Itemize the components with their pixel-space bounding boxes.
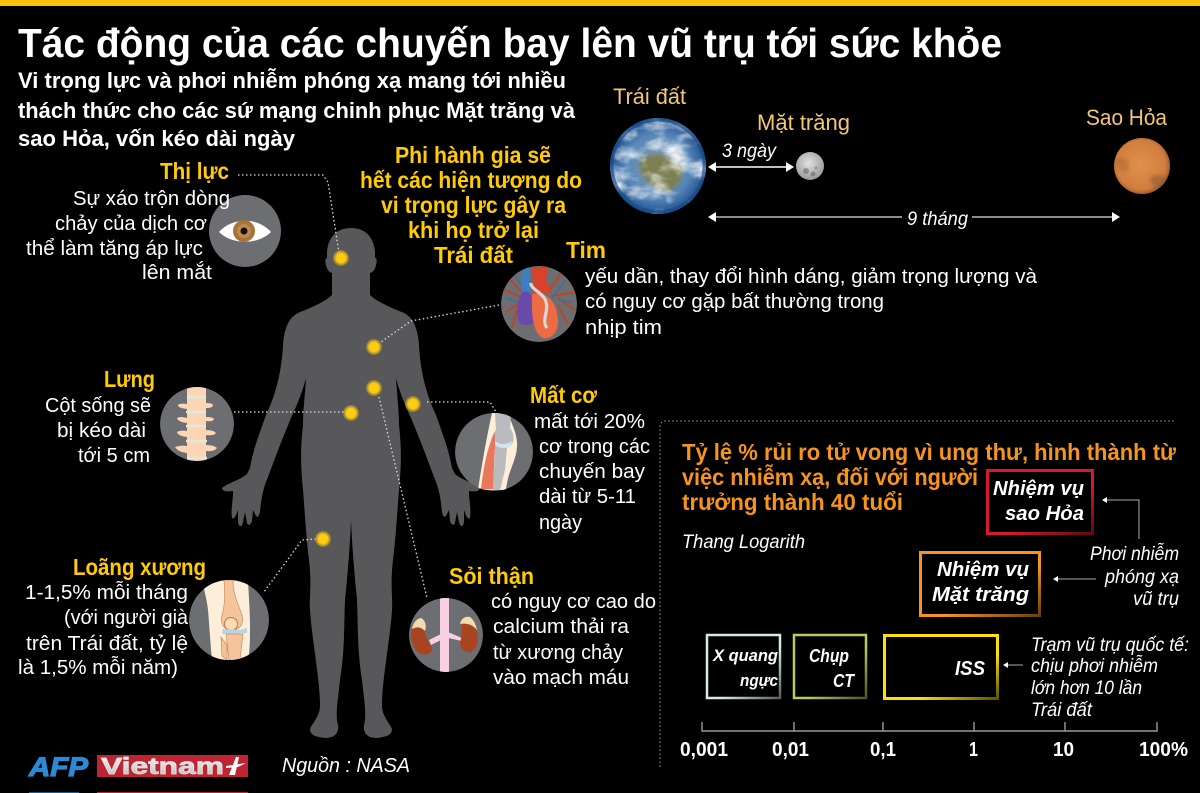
log scale axis: 0,01 <box>772 739 809 761</box>
callout: muscle loss: cơ trong các <box>539 436 650 458</box>
callout: back <box>45 366 155 467</box>
callout: kidney stones: vào mạch máu <box>493 667 629 689</box>
callout: astronaut recovery: khi họ trở lại <box>408 217 539 243</box>
callout: bone loss: (với người già <box>64 607 189 629</box>
planet labels: Sao Hỏa <box>1086 105 1168 130</box>
panel heading: Tỷ lệ % rủi ro tử vong vì ung thư, hình thành từ <box>682 439 1176 465</box>
callout: kidney stones: từ xương chảy <box>493 642 623 664</box>
callout: back: Lưng <box>104 366 155 392</box>
callout: muscle loss: ngày <box>539 512 582 534</box>
callout: kidney stones: calcium thải ra <box>493 616 630 638</box>
callout: heart: Tim <box>566 237 606 263</box>
log scale axis: 1 <box>969 739 978 761</box>
intro text <box>18 68 576 151</box>
arrow: Earth to Mars, 9 months: 9 tháng <box>907 209 968 230</box>
callout: vision: Sự xáo trộn dòng <box>73 188 230 210</box>
box: CT scan: Chụp <box>809 646 849 666</box>
box: chest X-ray <box>707 635 780 698</box>
planet labels: Mặt trăng <box>757 110 850 135</box>
source: Nguồn : NASA <box>282 755 410 777</box>
callout: bone loss: là 1,5% mỗi năm) <box>18 656 178 679</box>
intro text: sao Hỏa, vốn kéo dài ngày <box>18 126 296 151</box>
callout: back: bị kéo dài <box>57 420 146 442</box>
callout: heart <box>566 237 1038 339</box>
planet labels: Trái đất <box>613 84 686 109</box>
intro text: Vi trọng lực và phơi nhiễm phóng xạ mang tới nhiều <box>18 68 566 93</box>
planet labels <box>613 84 1168 135</box>
arrow: Earth to Moon, 3 days <box>708 141 794 172</box>
callout: vision: chảy của dịch cơ <box>55 213 207 235</box>
callout: heart: yếu dần, thay đổi hình dáng, giảm trọng lượng và <box>585 266 1038 288</box>
callout: bone loss: Loãng xương <box>73 554 206 580</box>
callout: vision <box>26 158 230 284</box>
annotation: space radiation exposure <box>1090 544 1179 610</box>
arrow: Earth to Mars, 9 months <box>708 209 1120 230</box>
callout: back: Cột sống sẽ <box>45 395 151 417</box>
box: ISS: ISS <box>955 658 986 680</box>
logo: Vietnam+: Vietnam <box>101 753 224 779</box>
callout: astronaut recovery: vi trọng lực gây ra <box>381 192 566 218</box>
box: CT scan: CT <box>833 671 856 691</box>
callout: muscle loss: chuyến bay <box>539 461 645 483</box>
top accent bar <box>0 0 1200 6</box>
logo: AFP: AFP <box>28 752 89 782</box>
arrow: to ISS <box>1003 662 1023 668</box>
arrow: Earth to Moon, 3 days: 3 ngày <box>722 141 777 162</box>
box: Mars mission: sao Hỏa <box>1005 503 1084 525</box>
box: Moon mission: Nhiệm vụ <box>937 559 1029 581</box>
panel heading: việc nhiễm xạ, đối với người <box>682 463 978 490</box>
callout: astronaut recovery <box>360 142 582 268</box>
annotation: space radiation exposure: phóng xạ <box>1104 567 1179 588</box>
annotation: space radiation exposure: vũ trụ <box>1133 589 1179 610</box>
icon: knee <box>189 580 269 660</box>
body hotspots <box>315 250 421 547</box>
icon: kidneys <box>409 597 483 673</box>
box: Moon mission: Mặt trăng <box>932 584 1029 606</box>
box: Moon mission <box>920 552 1040 616</box>
callout: muscle loss: mất tới 20% <box>534 411 645 433</box>
planet: Mars <box>1114 138 1170 194</box>
callout: bone loss: 1-1,5% mỗi tháng <box>25 581 188 604</box>
callout: vision: thể làm tăng áp lực <box>26 238 203 260</box>
log scale axis: 0,001 <box>680 739 728 761</box>
icon: eye <box>209 195 281 267</box>
cropped repeat of logo strip <box>29 792 248 793</box>
box: CT scan <box>794 635 866 698</box>
panel heading: trưởng thành 40 tuổi <box>682 489 903 515</box>
scale note: Thang Logarith <box>682 532 805 553</box>
log scale axis: 0,1 <box>870 739 896 761</box>
panel: cancer risk chart <box>660 421 1189 767</box>
callout: heart: có nguy cơ gặp bất thường trong <box>585 291 884 313</box>
arrow: to Moon mission <box>1053 576 1096 582</box>
callout: astronaut recovery: Trái đất <box>434 242 513 268</box>
callout: kidney stones <box>449 563 656 689</box>
callout: muscle loss: Mất cơ <box>530 382 598 408</box>
annotation: ISS exposure: Trạm vũ trụ quốc tế: <box>1031 635 1189 656</box>
annotation: ISS exposure: lớn hơn 10 lần <box>1031 678 1142 699</box>
callout: astronaut recovery: hết các hiện tượng do <box>360 167 582 193</box>
title: Tác động của các chuyến bay lên vũ trụ tới sức khỏe <box>18 20 1002 66</box>
annotation: ISS exposure <box>1031 635 1189 721</box>
annotation: ISS exposure: chịu phơi nhiễm <box>1031 656 1158 677</box>
log scale axis: 100% <box>1139 739 1188 761</box>
callout: kidney stones: có nguy cơ cao do <box>491 591 656 613</box>
callout: bone loss <box>18 554 206 679</box>
callout: muscle loss: dài từ 5-11 <box>539 486 636 508</box>
box: Mars mission <box>988 470 1092 534</box>
callout: vision: lên mắt <box>142 261 212 284</box>
body silhouette <box>222 228 480 738</box>
icon: heart <box>501 266 577 342</box>
annotation: ISS exposure: Trái đất <box>1031 700 1093 721</box>
box: chest X-ray: X quang <box>712 646 779 665</box>
callout: vision: Thị lực <box>160 158 229 184</box>
box: ISS <box>884 636 998 698</box>
icon: arm muscle <box>455 413 533 491</box>
annotation: space radiation exposure: Phơi nhiễm <box>1090 544 1179 565</box>
callout: muscle loss <box>530 382 650 534</box>
callout: astronaut recovery: Phi hành gia sẽ <box>395 142 551 168</box>
callout: heart: nhịp tim <box>585 317 662 339</box>
logo: Vietnam+ <box>97 753 248 779</box>
intro text: thách thức cho các sứ mạng chinh phục Mặt trăng và <box>18 98 576 123</box>
log scale axis <box>680 722 1188 761</box>
planet: Moon <box>796 152 824 180</box>
icon: spine <box>160 387 234 461</box>
panel heading <box>682 439 1176 515</box>
arrow: to Mars mission <box>1102 497 1139 539</box>
callout: bone loss: trên Trái đất, tỷ lệ <box>26 633 188 655</box>
box: Mars mission: Nhiệm vụ <box>993 478 1084 500</box>
leader lines <box>234 175 499 598</box>
planet: Earth <box>610 118 706 214</box>
callout: back: tới 5 cm <box>78 445 150 467</box>
box: chest X-ray: ngực <box>740 671 778 690</box>
callout: kidney stones: Sỏi thận <box>449 563 534 589</box>
log scale axis: 10 <box>1053 739 1074 761</box>
